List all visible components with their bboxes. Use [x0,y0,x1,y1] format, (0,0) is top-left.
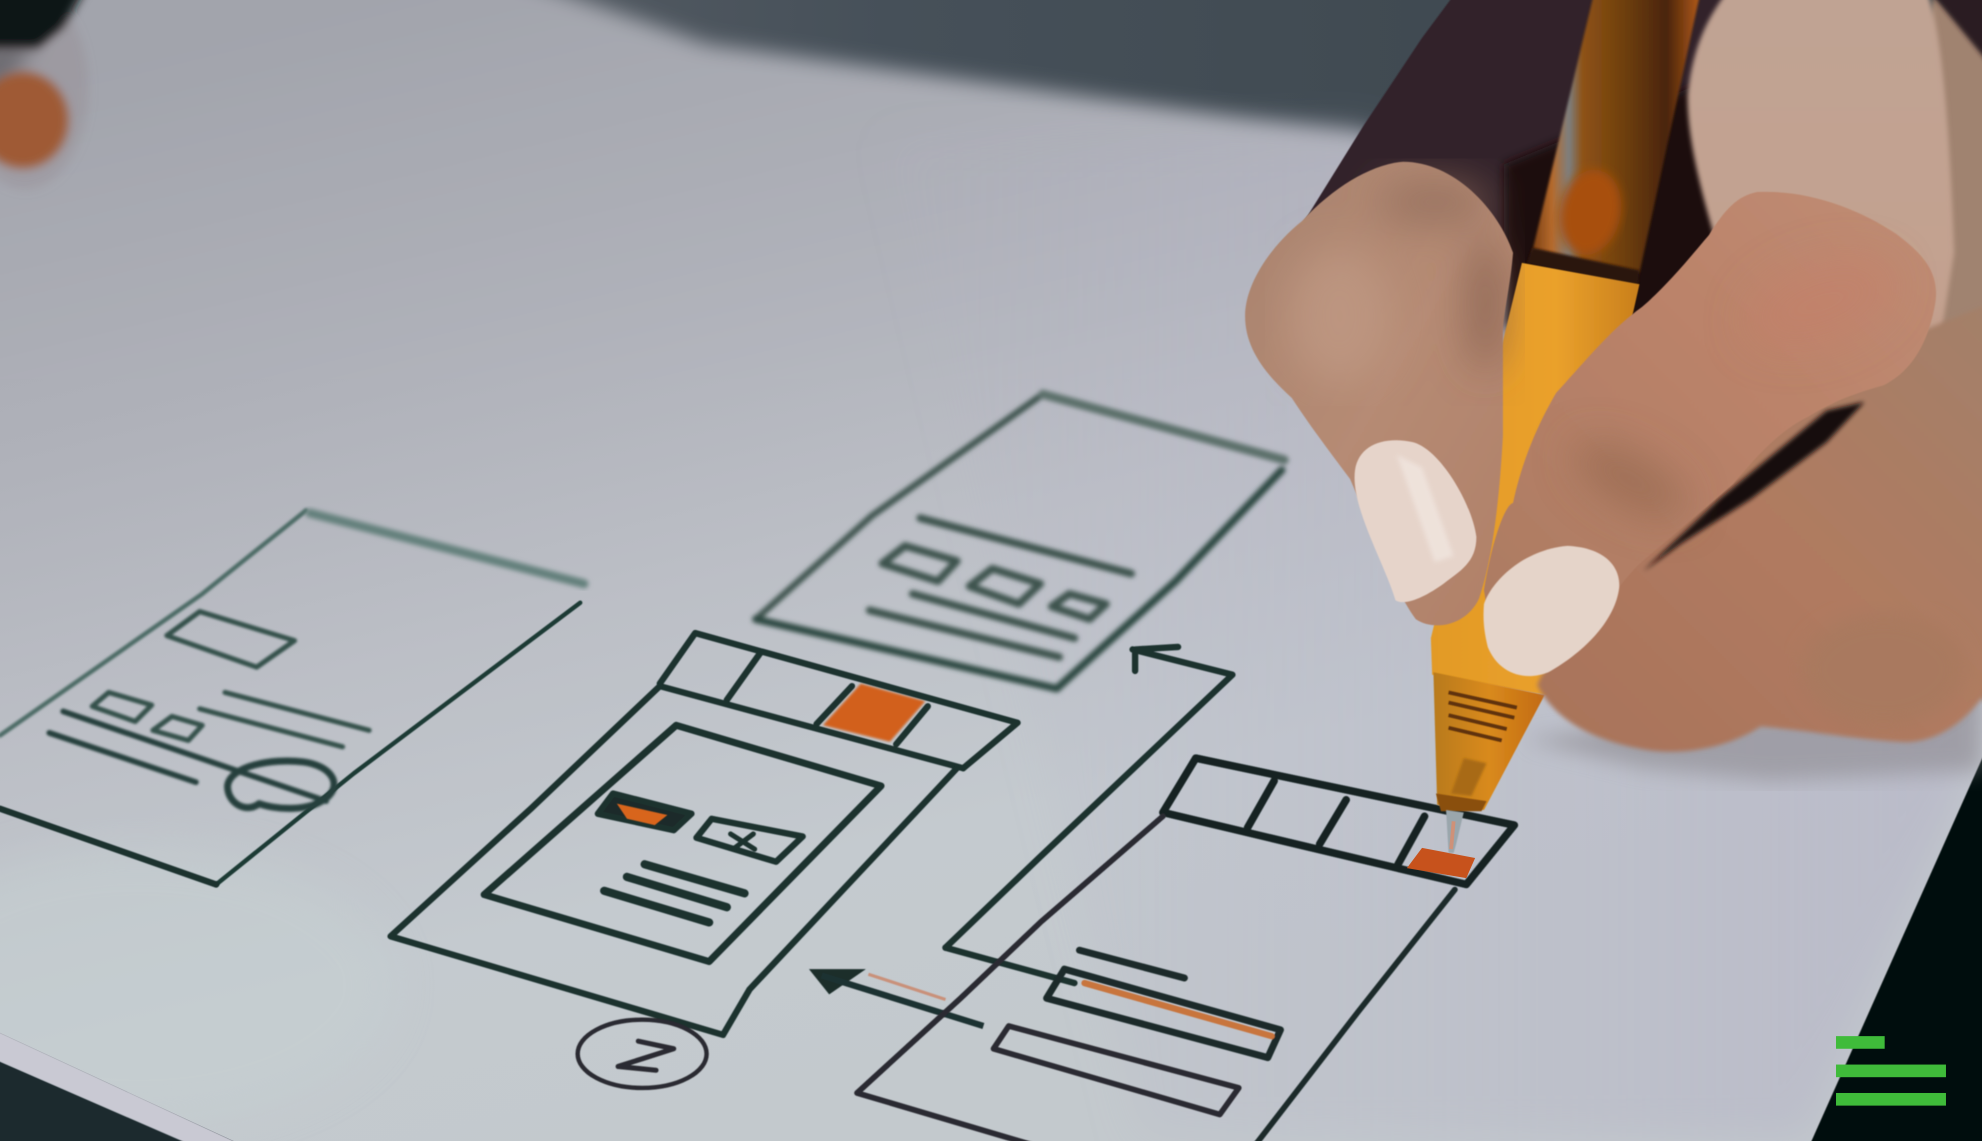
orange highlight tab [823,684,925,742]
index finger shading [1287,179,1503,385]
logo: three green bars [1836,1036,1946,1106]
sketch: top wireframe [756,394,1284,689]
shadow inside hand [1504,76,1738,329]
blurred object top left [0,0,88,190]
sweater sleeve [1302,0,1770,329]
thumb fingernail [1483,546,1619,676]
sketch: bottom right body [857,816,1455,1141]
dark gap between fingers [1643,402,1864,571]
index finger [1245,162,1513,625]
paper edge and dark table corners [0,753,1982,1141]
background table [0,0,1982,190]
lower finger highlight [1801,613,1966,727]
index nail highlight [1397,455,1454,562]
hand back, right side [1770,0,1982,708]
thumb shading [1563,238,1908,534]
hand shadow on paper [1523,682,1982,781]
index fingernail [1355,440,1476,602]
orange pen [1431,0,1700,853]
arrow: up-right bracket [945,647,1232,983]
sketch: bottom right wireframe [1163,758,1514,884]
arrow: to middle wireframe [809,969,983,1026]
orange square under pen tip [1407,848,1475,878]
lower hand [1537,303,1982,752]
thumb finger [1484,192,1936,665]
sketch: middle wireframe [391,633,1018,1088]
upper finger [1687,0,1954,505]
sketch: left wireframe [0,510,584,884]
orange marks in inner box [617,804,667,825]
sweater top right [1931,0,1982,66]
